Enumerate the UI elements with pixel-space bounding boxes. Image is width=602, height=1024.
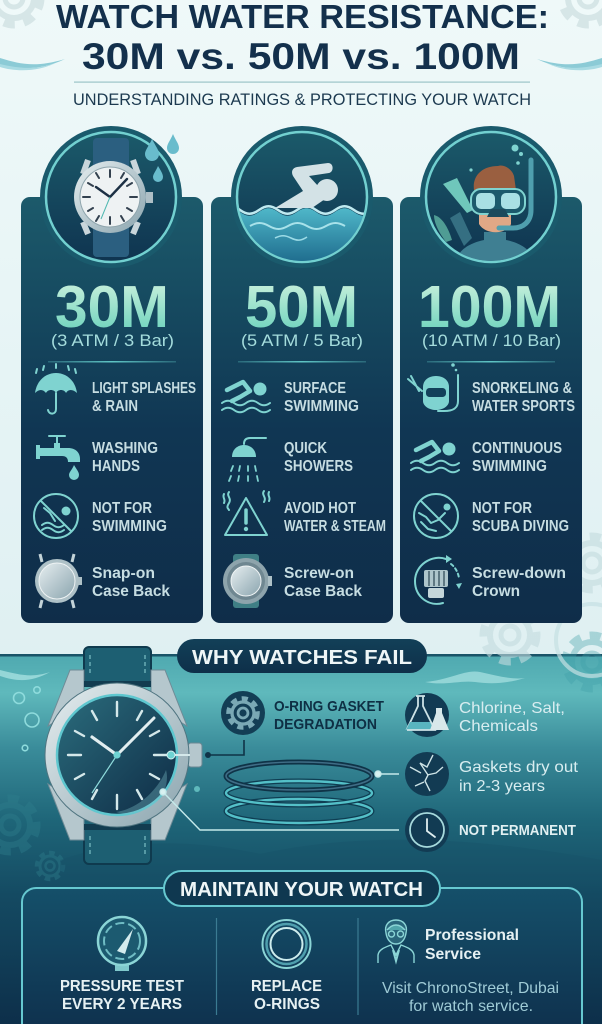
pill heading	[164, 871, 440, 906]
text: quick showers: SHOWERS	[284, 458, 353, 475]
text: gaskets dry: Gaskets dry out	[459, 759, 579, 776]
text: professional service: Professional	[425, 927, 519, 944]
panel: why watches fail	[14, 639, 579, 864]
text: not for scuba	[472, 500, 569, 535]
text: screw-on: Case Back	[284, 583, 362, 600]
pill heading	[177, 639, 427, 673]
text: continuous swimming	[472, 440, 562, 475]
text: snap-on	[92, 565, 170, 600]
text: snorkeling: WATER SPORTS	[472, 398, 575, 415]
icon: screw-down crown	[415, 555, 462, 604]
icon: swimmer	[221, 126, 373, 268]
title: 30M vs. 50M vs. 100M	[82, 36, 520, 77]
text: washing hands	[92, 440, 158, 475]
icon: swimmer small	[411, 442, 459, 472]
text: screw-on: Screw-on	[284, 565, 354, 582]
text: replace o-rings: REPLACE	[251, 978, 322, 995]
text: visit chronostreet: Visit ChronoStreet, Dubai	[382, 980, 559, 997]
text: washing hands: HANDS	[92, 458, 140, 475]
icon: tap	[36, 436, 80, 480]
icon: watch with droplets	[40, 126, 182, 268]
text: avoid hot: WATER & STEAM	[284, 518, 386, 535]
o-rings	[226, 762, 372, 823]
text: not for swimming: SWIMMING	[92, 518, 167, 535]
large watch	[45, 647, 202, 864]
header	[56, 0, 549, 109]
callout: o-ring gasket: DEGRADATION	[274, 716, 377, 733]
100M label: 100M	[418, 274, 561, 340]
text: light splashes	[92, 380, 196, 415]
icon: screw-on case back	[223, 554, 272, 608]
text: professional service: Service	[425, 946, 481, 963]
text: pressure test	[60, 978, 184, 1013]
icon: clock	[405, 808, 449, 852]
icon: pressure gauge	[98, 917, 146, 971]
text: replace o-rings: O-RINGS	[254, 996, 320, 1013]
text: pressure test: EVERY 2 YEARS	[62, 996, 182, 1013]
text: screw-down crown	[472, 565, 566, 600]
text: screw-on	[284, 565, 362, 600]
text: replace o-rings	[251, 978, 322, 1013]
icon: technician	[378, 920, 414, 963]
10 ATM label: (10 ATM / 10 Bar)	[422, 331, 561, 350]
leader lines	[160, 771, 399, 830]
text: not for swimming	[92, 500, 167, 535]
icon: cracks	[405, 752, 449, 796]
text: surface swimming	[284, 380, 359, 415]
bubbles	[14, 687, 200, 792]
text: professional service	[425, 927, 519, 963]
text: snap-on: Snap-on	[92, 565, 155, 582]
pill heading: WHY WATCHES FAIL	[192, 647, 412, 669]
panel: maintain your watch	[22, 871, 582, 1024]
icon: snorkel mask	[408, 363, 458, 411]
panel: 30M	[21, 126, 203, 623]
text: light splashes: LIGHT SPLASHES	[92, 380, 196, 397]
panel: 100M	[400, 126, 582, 623]
text: surface swimming: SWIMMING	[284, 398, 359, 415]
icon: umbrella	[35, 364, 77, 414]
text: snorkeling	[472, 380, 575, 415]
text: not for scuba: SCUBA DIVING	[472, 518, 569, 535]
text: visit chronostreet: for watch service.	[409, 998, 533, 1015]
callout: o-ring gasket	[205, 691, 384, 758]
30M label: 30M	[55, 274, 169, 340]
icon: shower	[229, 438, 266, 481]
pill heading: MAINTAIN YOUR WATCH	[180, 879, 423, 901]
text: continuous swimming: CONTINUOUS	[472, 440, 562, 457]
text: not permanent: NOT PERMANENT	[459, 822, 576, 839]
text: continuous swimming: SWIMMING	[472, 458, 547, 475]
text: screw-down crown: Crown	[472, 583, 520, 600]
icon: snap-on case back	[35, 554, 82, 608]
text: not for swimming: NOT FOR	[92, 500, 152, 517]
text: quick showers	[284, 440, 353, 475]
text: light splashes: & RAIN	[92, 398, 138, 415]
text: pressure test: PRESSURE TEST	[60, 978, 184, 995]
50M label: 50M	[245, 274, 358, 340]
5 ATM label: (5 ATM / 5 Bar)	[241, 331, 363, 350]
callout: o-ring gasket: O-RING GASKET	[274, 698, 384, 715]
icon: chemicals	[405, 693, 449, 737]
text: gaskets dry	[459, 759, 579, 795]
text: snap-on: Case Back	[92, 583, 170, 600]
icon: o-ring	[262, 920, 310, 968]
icon: hot warning	[223, 491, 270, 535]
title	[56, 0, 549, 77]
icon: no scuba	[414, 494, 458, 538]
icon: snorkeler	[420, 126, 562, 268]
icon: no swimming	[34, 494, 78, 538]
panel: 50M	[211, 126, 393, 623]
text: quick showers: QUICK	[284, 440, 327, 457]
text: chlorine: Chlorine, Salt,	[459, 700, 565, 717]
text: snorkeling: SNORKELING &	[472, 380, 572, 397]
text: avoid hot	[284, 500, 386, 535]
text: visit chronostreet	[382, 980, 559, 1015]
text: screw-down crown: Screw-down	[472, 565, 566, 582]
text: gaskets dry: in 2-3 years	[459, 778, 545, 795]
text: chlorine: Chemicals	[459, 718, 538, 735]
text: washing hands: WASHING	[92, 440, 158, 457]
3 ATM label: (3 ATM / 3 Bar)	[51, 331, 174, 350]
subtitle: UNDERSTANDING RATINGS & PROTECTING YOUR WATCH	[73, 91, 531, 109]
text: not for scuba: NOT FOR	[472, 500, 532, 517]
text: chlorine	[459, 700, 565, 735]
text: avoid hot: AVOID HOT	[284, 500, 356, 517]
icon: swimmer small	[222, 382, 270, 412]
text: surface swimming: SURFACE	[284, 380, 346, 397]
